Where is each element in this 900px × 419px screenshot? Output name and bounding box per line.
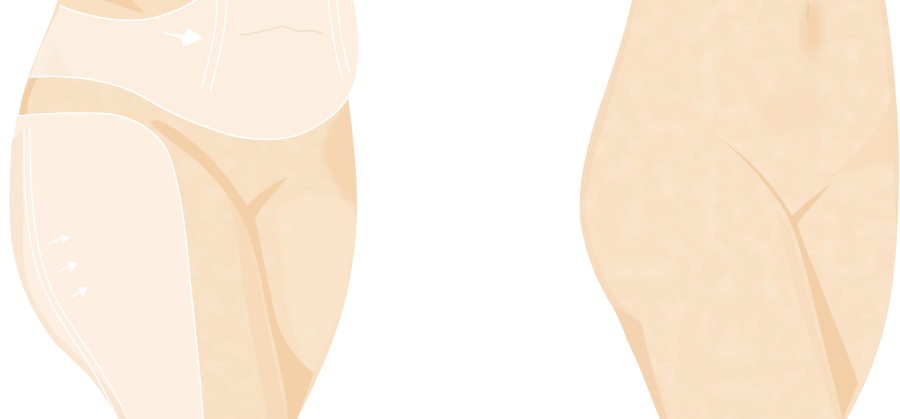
icon: small arrow 3 — [72, 287, 88, 297]
crease: groin fold — [718, 137, 858, 419]
navel shading — [804, 2, 820, 58]
left body base — [10, 0, 357, 419]
belly top contour — [60, 0, 196, 20]
belly vertical lines right — [328, 0, 343, 80]
thigh outer edge shade — [9, 130, 128, 419]
belly fold accent — [103, 0, 146, 14]
right flank shading — [322, 98, 357, 215]
belly overlay panel — [30, 0, 358, 139]
belly subtle shading — [40, 45, 88, 88]
crease: groin fold — [150, 120, 314, 419]
thigh vertical lines — [24, 130, 117, 417]
thigh overlay panel — [10, 113, 203, 419]
inner thigh lighter panel — [288, 197, 356, 362]
icon: large arrow — [160, 28, 203, 47]
hip side shading — [18, 77, 38, 116]
wrinkle line — [241, 26, 321, 35]
figure: right torso — [575, 0, 900, 419]
top dark fold — [60, 0, 196, 20]
right body base — [580, 0, 899, 419]
belly bottom contour — [30, 76, 352, 139]
hip edge shade — [613, 307, 667, 419]
belly vertical lines left — [202, 0, 217, 87]
right body inner panel and textures — [575, 0, 900, 419]
left body mottled texture — [18, 78, 357, 419]
white contour lines — [17, 0, 352, 419]
thigh shadow band — [205, 150, 288, 419]
thigh band shade — [778, 212, 837, 412]
icon: small arrow 2 — [59, 262, 78, 271]
thigh contour — [17, 113, 203, 419]
navel mark — [807, 3, 809, 20]
right lower flank shade — [834, 93, 899, 175]
icon: small arrow 1 — [50, 235, 70, 243]
figure: left torso (marked) — [0, 0, 370, 419]
